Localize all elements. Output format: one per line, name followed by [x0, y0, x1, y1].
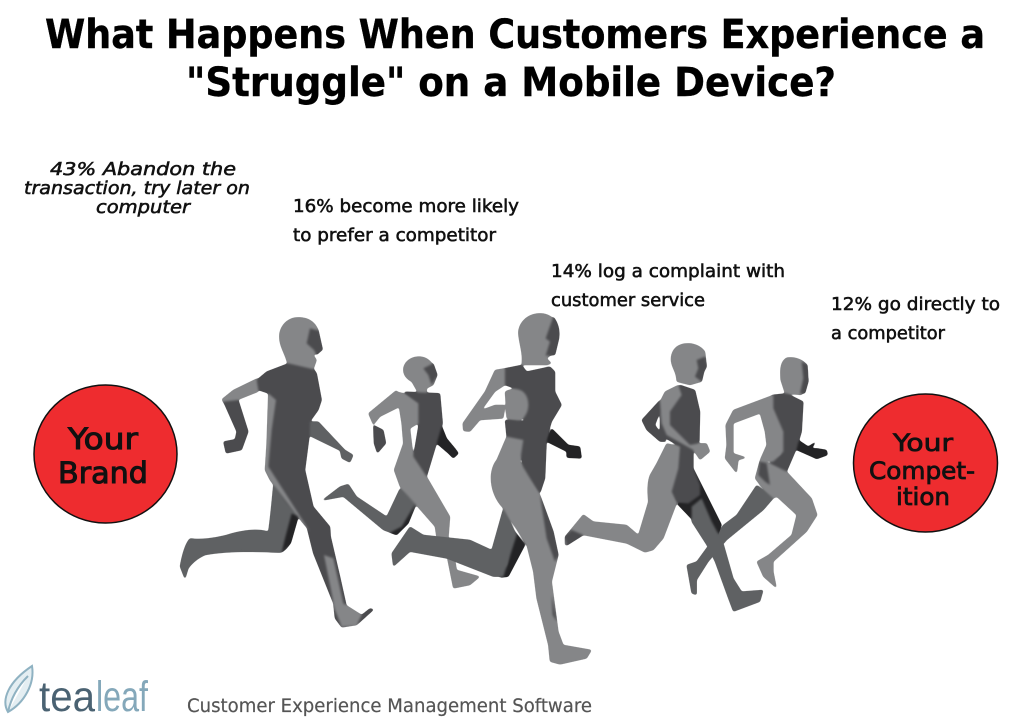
your competition circle: ition [896, 483, 950, 511]
your brand circle [34, 385, 177, 523]
runner 3 [392, 313, 592, 664]
callout: 12% go to competitor [831, 295, 1000, 344]
runner 5 [687, 357, 828, 595]
runner 1 [180, 317, 374, 627]
your competition circle [854, 394, 998, 532]
callout: 43% abandon: 43% Abandon the [50, 160, 236, 180]
your competition circle: Compet- [869, 457, 975, 485]
logo wordmark [39, 673, 149, 721]
tealeaf logo [5, 666, 149, 721]
callout: 43% abandon: computer [96, 198, 192, 218]
logo wordmark: tea [39, 673, 95, 721]
callout: 14% complaint: 14% log a complaint with [551, 262, 785, 282]
callout: 14% complaint: customer service [551, 291, 705, 311]
your brand circle: Your [67, 422, 138, 456]
title: "Struggle" on a Mobile Device? [186, 60, 836, 106]
logo wordmark: leaf [96, 673, 149, 721]
callout: 12% go to competitor: a competitor [831, 324, 946, 344]
callout: 16% competitor preference [293, 197, 519, 246]
callout: 12% go to competitor: 12% go directly to [831, 295, 1000, 315]
callout: 43% abandon: transaction, try later on [24, 179, 250, 199]
your competition circle: Your [892, 429, 953, 457]
title [45, 12, 985, 106]
callout: 16% competitor preference: 16% become more likely [293, 197, 519, 217]
callout: 14% complaint [551, 262, 785, 311]
runner 2 [322, 357, 480, 588]
runner 4 [565, 343, 763, 612]
callout: 43% abandon [24, 160, 250, 218]
your brand circle: Brand [58, 456, 148, 490]
callout: 16% competitor preference: to prefer a competitor [293, 226, 497, 246]
tagline: Customer Experience Management Software [187, 695, 592, 717]
icon: leaf [5, 666, 32, 712]
